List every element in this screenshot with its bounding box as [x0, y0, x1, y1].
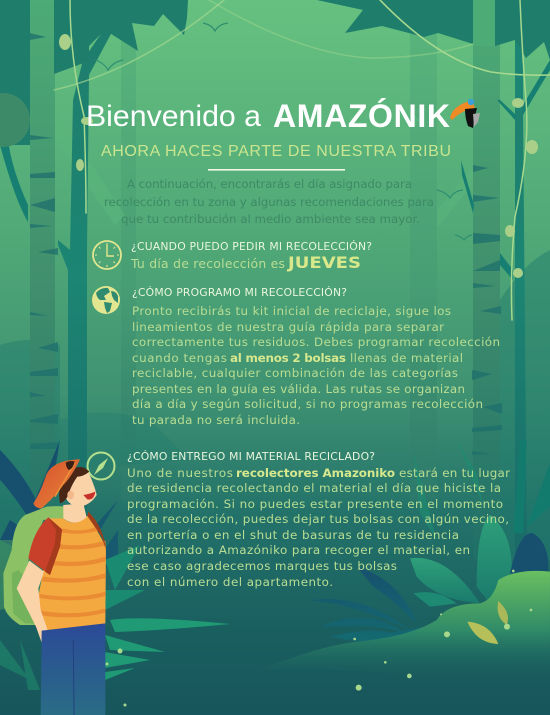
icon: clock — [93, 241, 121, 269]
intro text: que tu contribución al medio ambiente sea mayor. — [121, 212, 420, 226]
section: how to hand over: ¿CÓMO ENTREGO MI MATERIAL RECICLADO? — [127, 450, 375, 463]
section: how to schedule: Pronto recibirás tu kit inicial de reciclaje, sigue los — [132, 304, 451, 318]
sleeve — [28, 517, 62, 575]
section: how to hand over — [127, 450, 510, 589]
section: how to schedule: cuando tengas — [132, 351, 227, 365]
title: AMAZÓNIK — [273, 98, 450, 134]
section: how to hand over: de residencia recolectando el material el día que hiciste la — [127, 481, 501, 495]
glowing dots — [353, 570, 532, 691]
section: how to hand over: programación. Si no puedes estar presente en el momento — [127, 497, 503, 511]
icon: globe — [92, 286, 120, 314]
section: collection day: ¿CUANDO PUEDO PEDIR MI RECOLECCIÓN? — [131, 240, 372, 253]
right trees — [461, 40, 550, 560]
title: Bienvenido a — [86, 100, 261, 133]
section: how to hand over: recolectores Amazoniko — [236, 466, 395, 480]
tall leaves — [410, 440, 550, 607]
pants — [41, 623, 105, 715]
divider — [208, 169, 345, 171]
section: how to hand over: con el número del apartamento. — [127, 575, 333, 589]
jungle vines — [54, 0, 550, 320]
section: collection day — [130, 240, 372, 272]
section: how to schedule: ¿CÓMO PROGRAMO MI RECOLECCIÓN? — [132, 286, 347, 299]
golden leaves — [467, 622, 498, 644]
intro text: recolección en tu zona y algunas recomendaciones para — [104, 195, 434, 209]
section: how to hand over: ese caso agradecemos marques tus bolsas — [127, 559, 397, 573]
cap — [33, 459, 80, 508]
intro text: A continuación, encontrarás el día asignado para — [127, 177, 412, 191]
section: collection day: JUEVES — [287, 253, 361, 272]
illustration: hiker — [3, 459, 106, 715]
face — [65, 469, 97, 507]
shirt — [38, 515, 106, 631]
section: how to schedule — [132, 286, 500, 427]
section: how to schedule: día a día y según solicitud, si no programas recolección — [132, 397, 483, 411]
section: how to hand over: de la recolección, puedes dejar tus bolsas con algún vecino, — [127, 512, 509, 526]
hill — [260, 571, 550, 681]
forest background: faint trunks and hills — [0, 30, 550, 560]
arm — [17, 561, 50, 647]
birds — [96, 23, 472, 240]
icon: toucan — [450, 99, 480, 128]
glowing dots on the ground — [106, 648, 126, 706]
hair — [59, 467, 89, 503]
section: how to schedule: presentes en la guía es válida. Las rutas se organizan — [132, 382, 465, 396]
section: how to hand over: autorizando a Amazóniko para recoger el material, en — [127, 543, 470, 557]
section: how to hand over: Uno de nuestros — [127, 466, 233, 480]
section: how to schedule: correctamente tus residuos. Debes programar recolección — [132, 335, 500, 349]
title — [86, 98, 450, 134]
section: how to hand over: estará en tu lugar — [399, 466, 510, 480]
section: how to schedule: reciclable, cualquier combinación de las categorías — [132, 366, 458, 380]
left trees — [0, 0, 112, 560]
shirt stripes — [39, 527, 106, 617]
section: how to schedule: al menos 2 bolsas — [230, 351, 346, 365]
vine leaves — [59, 34, 538, 278]
subtitle: AHORA HACES PARTE DE NUESTRA TRIBU — [101, 143, 451, 160]
blue fronds — [310, 567, 423, 642]
foliage and hill on the right — [260, 440, 550, 691]
backpack — [3, 506, 72, 625]
section: how to hand over: en portería o en el shut de basuras de tu residencia — [127, 528, 459, 542]
intro text — [104, 177, 434, 226]
icon: compass — [88, 452, 114, 480]
strap — [87, 512, 106, 550]
tree canopies — [54, 0, 550, 74]
section: how to schedule: lineamientos de nuestra guía rápida para separar — [132, 320, 444, 334]
section: collection day: Tu día de recolección es — [130, 256, 285, 271]
section: how to schedule: tu parada no será incluida. — [132, 413, 300, 427]
foliage behind the person — [0, 440, 230, 690]
neck and collar — [63, 503, 87, 523]
section: how to schedule: llenas de material — [350, 351, 463, 365]
